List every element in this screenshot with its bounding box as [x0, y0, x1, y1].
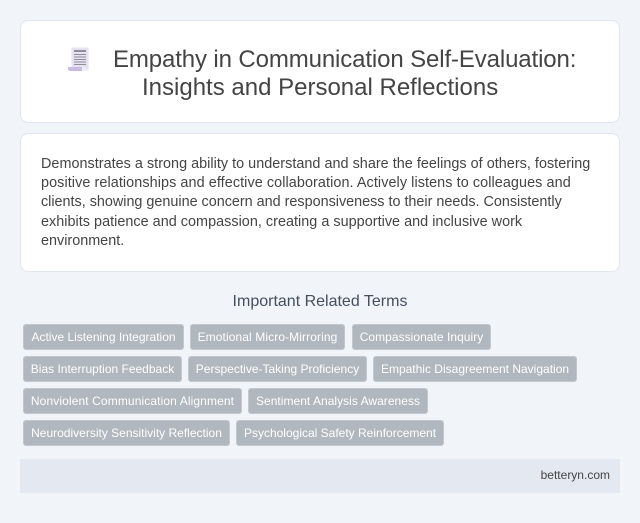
heading: important related terms: Important Related Terms	[233, 293, 407, 310]
icon: document scroll	[68, 48, 88, 71]
tag: Compassionate Inquiry	[360, 330, 483, 344]
tag	[373, 356, 577, 382]
text block: description	[41, 156, 590, 249]
text block: description: exhibits patience and compassion, creating a supportive and inclusive work	[41, 214, 522, 230]
tag	[23, 324, 184, 350]
heading: title line 2: Insights and Personal Reflections	[142, 74, 498, 101]
panel: description card	[20, 133, 620, 272]
tag	[188, 356, 367, 382]
tag	[23, 388, 242, 414]
tag: Psychological Safety Reinforcement	[244, 426, 436, 440]
tag	[236, 420, 444, 446]
footer bar	[20, 459, 620, 493]
heading: title line 1: Empathy in Communication Self-Evaluation:	[113, 46, 576, 73]
tag: Emotional Micro-Mirroring	[198, 330, 337, 344]
tag	[190, 324, 345, 350]
panel: header card	[20, 20, 620, 123]
tag	[23, 356, 182, 382]
tag: Neurodiversity Sensitivity Reflection	[31, 426, 222, 440]
text block: description: environment.	[41, 233, 124, 249]
text block: description: Demonstrates a strong ability to understand and share the feelings of others, fostering	[41, 156, 590, 172]
tag	[248, 388, 428, 414]
tag: Active Listening Integration	[31, 330, 176, 344]
footer text: betteryn.com	[541, 468, 610, 482]
tag: Nonviolent Communication Alignment	[31, 394, 234, 408]
text block: description: positive relationships and effective collaboration. Actively listens to colleagues and	[41, 175, 571, 191]
text block: description: clients, showing genuine concern and responsiveness to their needs. Consistently	[41, 194, 562, 210]
tag	[23, 420, 230, 446]
tag list	[23, 324, 577, 446]
tag: Empathic Disagreement Navigation	[381, 362, 569, 376]
tag: Sentiment Analysis Awareness	[256, 394, 420, 408]
tag: Perspective-Taking Proficiency	[196, 362, 359, 376]
tag: Bias Interruption Feedback	[31, 362, 174, 376]
tag	[352, 324, 491, 350]
